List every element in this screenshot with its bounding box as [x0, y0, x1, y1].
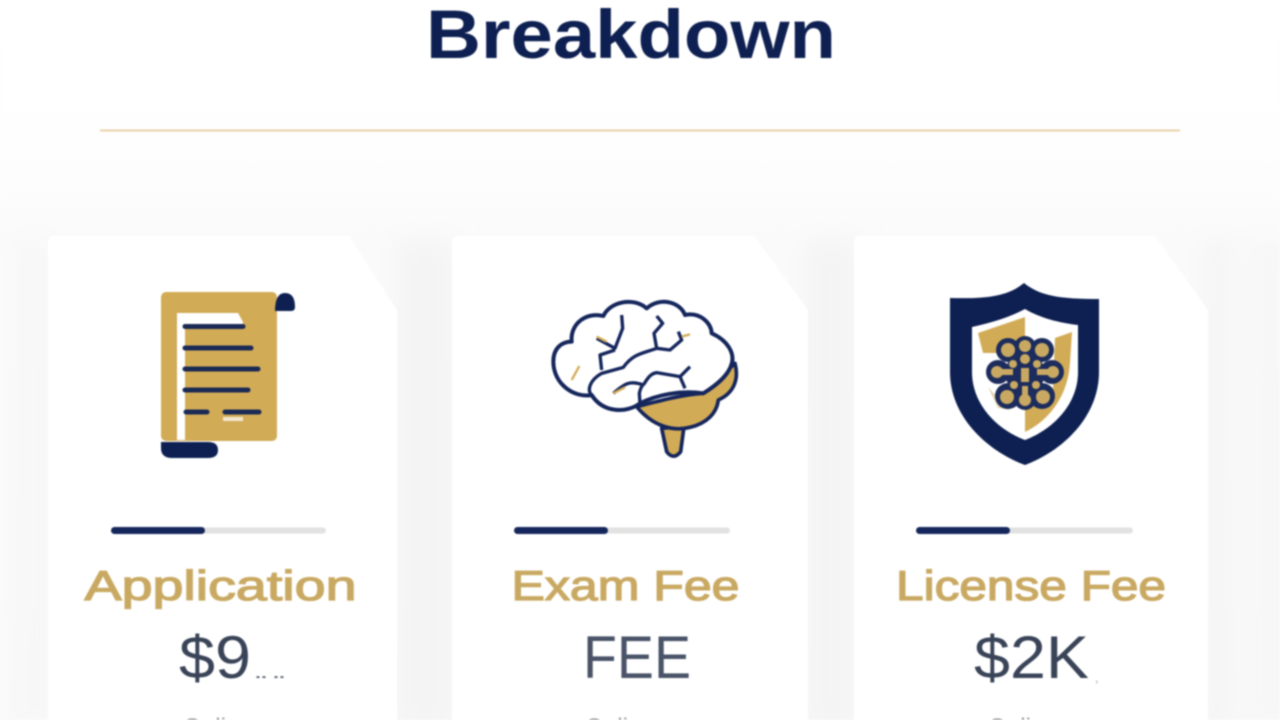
panel: exam fee	[452, 236, 808, 720]
icon: shield with brain	[950, 283, 1099, 465]
label: exam fee: Exam Fee	[512, 562, 740, 609]
value: application fee: .. ..	[255, 667, 285, 681]
panel: application	[48, 236, 397, 720]
value: exam fee: FEE	[583, 624, 691, 691]
value: license fee: $2K	[974, 624, 1089, 691]
value: license fee: ,	[1095, 671, 1098, 685]
label: application: Application	[84, 562, 356, 609]
icon: scroll document	[161, 292, 295, 458]
progress bar	[111, 527, 326, 534]
value: application fee: $9	[179, 624, 251, 691]
label: license fee: License Fee	[896, 562, 1166, 609]
value: application fee	[179, 624, 285, 691]
panel: license fee	[854, 236, 1208, 720]
progress bar	[916, 527, 1133, 534]
progress bar	[514, 527, 730, 534]
icon: brain	[553, 302, 736, 456]
